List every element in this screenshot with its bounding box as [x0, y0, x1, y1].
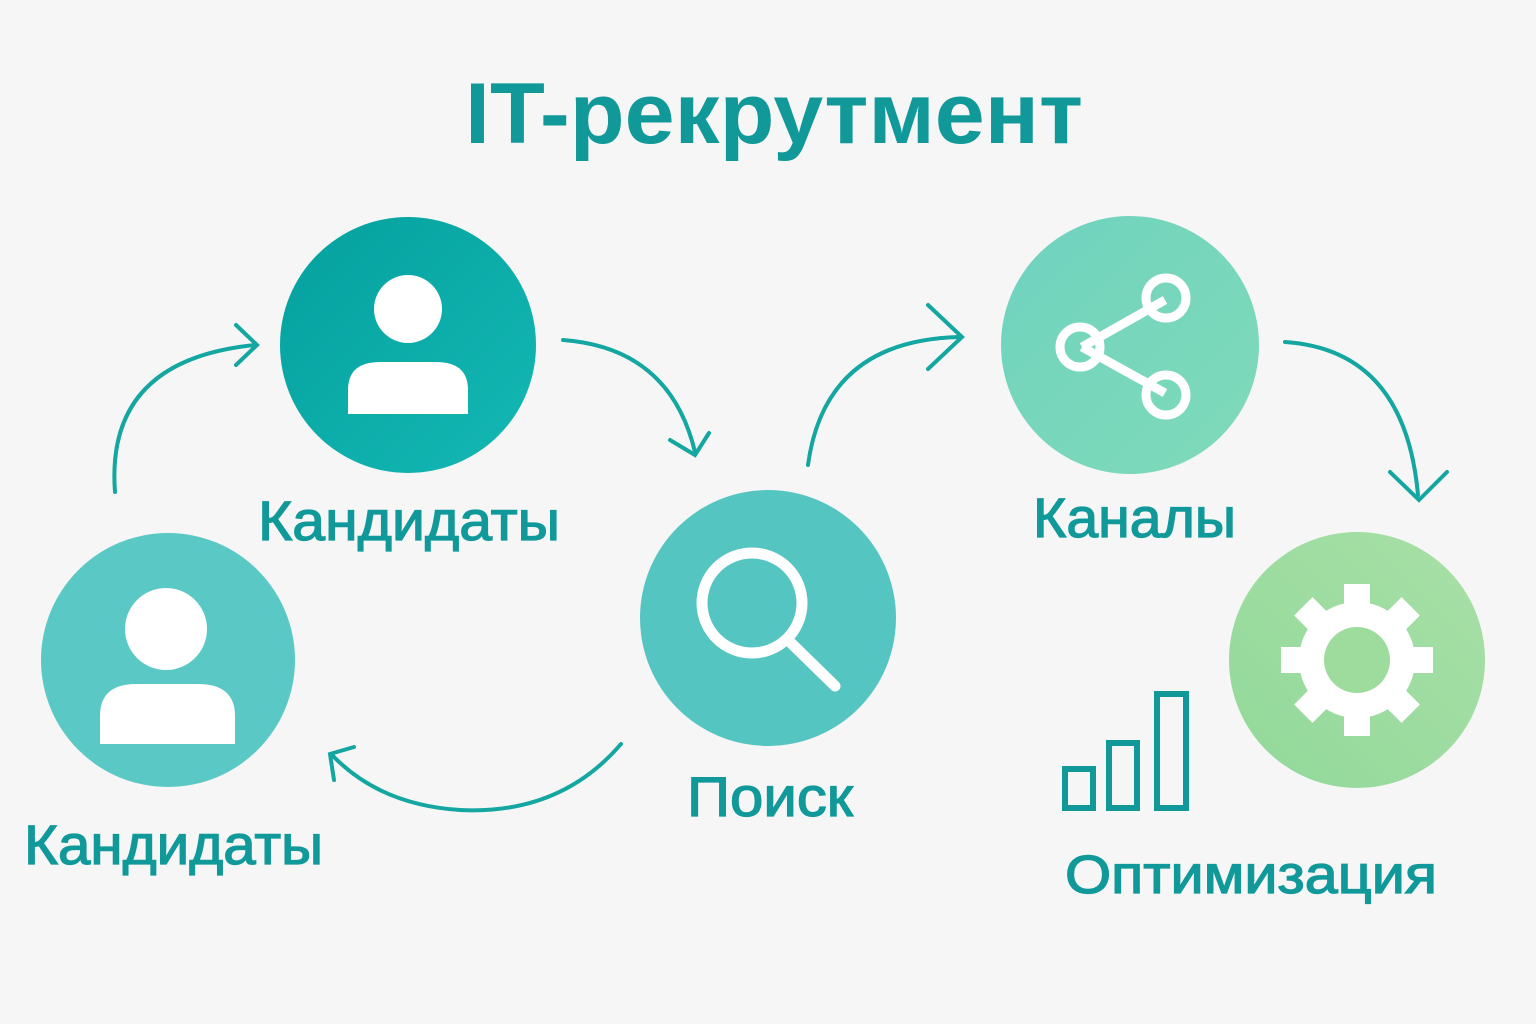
- node: channels: [1001, 216, 1259, 549]
- arrow: channels to gear: [1285, 342, 1447, 500]
- title: IT-рекрутмент: [465, 66, 1083, 162]
- icon: person: [348, 275, 468, 414]
- node: candidates bottom: [24, 533, 323, 876]
- arrow: top to search: [563, 340, 709, 455]
- node: optimization: [1229, 532, 1485, 788]
- label: Кандидаты: Кандидаты: [24, 813, 323, 876]
- label: Оптимизация: Оптимизация: [1065, 845, 1437, 905]
- icon: magnifier: [702, 553, 835, 686]
- arrow: search to bottom-left: [330, 744, 621, 810]
- label: Кандидаты: Кандидаты: [258, 489, 560, 552]
- arrow: search to channels: [808, 305, 962, 465]
- node: search: [640, 490, 896, 828]
- icon: share: [1060, 278, 1186, 415]
- icon: person: [100, 588, 235, 744]
- icon: gear: [1281, 584, 1433, 736]
- arrow: bottom-left to top: [114, 325, 257, 492]
- label: Каналы: Каналы: [1033, 486, 1236, 549]
- node: candidates top: [258, 217, 560, 552]
- icon: bar chart: [1065, 694, 1186, 808]
- label: Поиск: Поиск: [687, 765, 854, 828]
